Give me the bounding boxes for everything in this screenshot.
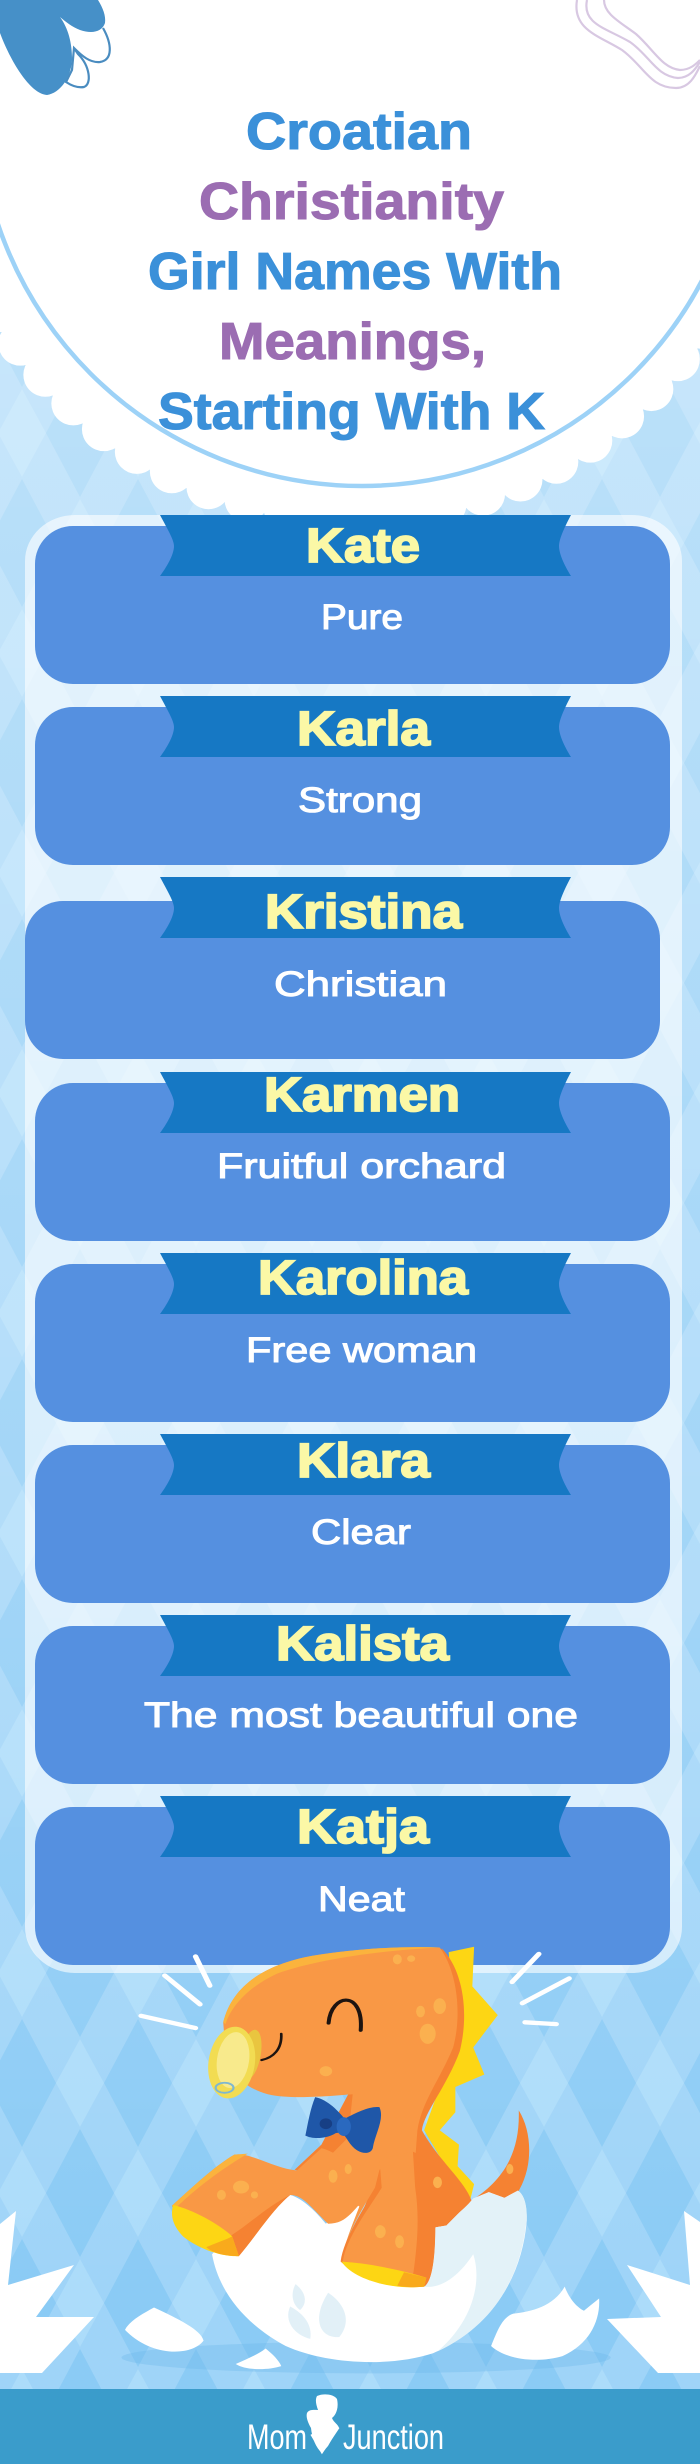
logo check mark — [312, 2427, 338, 2451]
card: Karmen: Fruitful orchard — [217, 1147, 506, 1186]
title: Meanings, — [219, 313, 486, 371]
excitement dashes — [141, 1954, 569, 2028]
card: Karolina: Free woman — [246, 1331, 477, 1370]
card: Kristina: Kristina — [265, 886, 462, 939]
dino left arm — [172, 2148, 375, 2256]
card: Klara: Klara — [297, 1435, 430, 1488]
panel: list backing — [25, 515, 682, 1973]
title: Christianity — [199, 173, 504, 231]
closed eye left — [262, 2034, 281, 2060]
dino body shade — [295, 1949, 471, 2281]
footer bar — [0, 2389, 700, 2464]
dino tail — [469, 2110, 529, 2224]
title — [148, 103, 562, 441]
dino head rim — [223, 1947, 440, 2024]
card: Karla — [35, 696, 670, 865]
card: Kalista: Kalista — [276, 1618, 449, 1671]
icon: blue leaf top left — [0, 0, 110, 95]
dino left foot — [172, 2205, 239, 2256]
title: Croatian — [246, 103, 472, 161]
card: Kate: Pure — [321, 598, 403, 637]
card: Katja: Katja — [297, 1801, 429, 1854]
card: Kalista: The most beautiful one — [144, 1696, 578, 1735]
logo figure — [307, 2394, 339, 2453]
card: Katja: Neat — [318, 1880, 405, 1919]
card: Katja — [35, 1796, 670, 1965]
header scalloped white circle — [0, 0, 700, 514]
logo wordmark Mom: Mom — [247, 2418, 307, 2457]
title: Girl Names With — [148, 243, 562, 301]
card: Kate — [35, 515, 670, 684]
card: Kate: Kate — [306, 520, 420, 573]
logo wordmark Junction: Junction — [343, 2418, 444, 2457]
white spiky shell pieces left — [0, 2211, 94, 2373]
blue bow tie — [305, 2097, 381, 2153]
logo: MomJunction — [247, 2394, 444, 2457]
egg shade — [424, 2191, 527, 2351]
card: Karmen — [35, 1069, 670, 1241]
shell fragment middle — [236, 2349, 281, 2369]
illustration: baby dinosaur hatching from egg — [121, 1947, 611, 2373]
card: Kalista — [35, 1615, 670, 1784]
title: Starting With K — [158, 383, 545, 441]
shadow under egg — [121, 2342, 611, 2373]
white spiky shell pieces right — [607, 2211, 700, 2373]
dino head and front — [223, 1947, 458, 2261]
card: Karolina — [35, 1252, 670, 1422]
card: Karla: Karla — [297, 703, 430, 756]
card: Kristina: Christian — [274, 965, 447, 1004]
shell fragment right — [491, 2287, 599, 2360]
icon: lilac wavy lines top right — [576, 0, 700, 88]
closed eye right — [329, 2000, 361, 2030]
dino spots — [217, 1954, 513, 2248]
card: Karmen: Karmen — [264, 1069, 460, 1122]
shell fragment left — [125, 2308, 204, 2352]
egg leaf marks — [288, 2284, 346, 2339]
card: Karla: Strong — [298, 781, 422, 820]
card: Klara — [35, 1434, 670, 1603]
dino spikes — [424, 1947, 498, 2206]
dino front foot — [342, 2261, 426, 2287]
card: Klara: Clear — [311, 1513, 411, 1552]
card: Karolina: Karolina — [258, 1252, 468, 1305]
egg shell — [212, 2191, 527, 2362]
dino front leg — [341, 2152, 471, 2287]
pacifier — [204, 2025, 265, 2100]
card: Kristina — [25, 877, 660, 1059]
